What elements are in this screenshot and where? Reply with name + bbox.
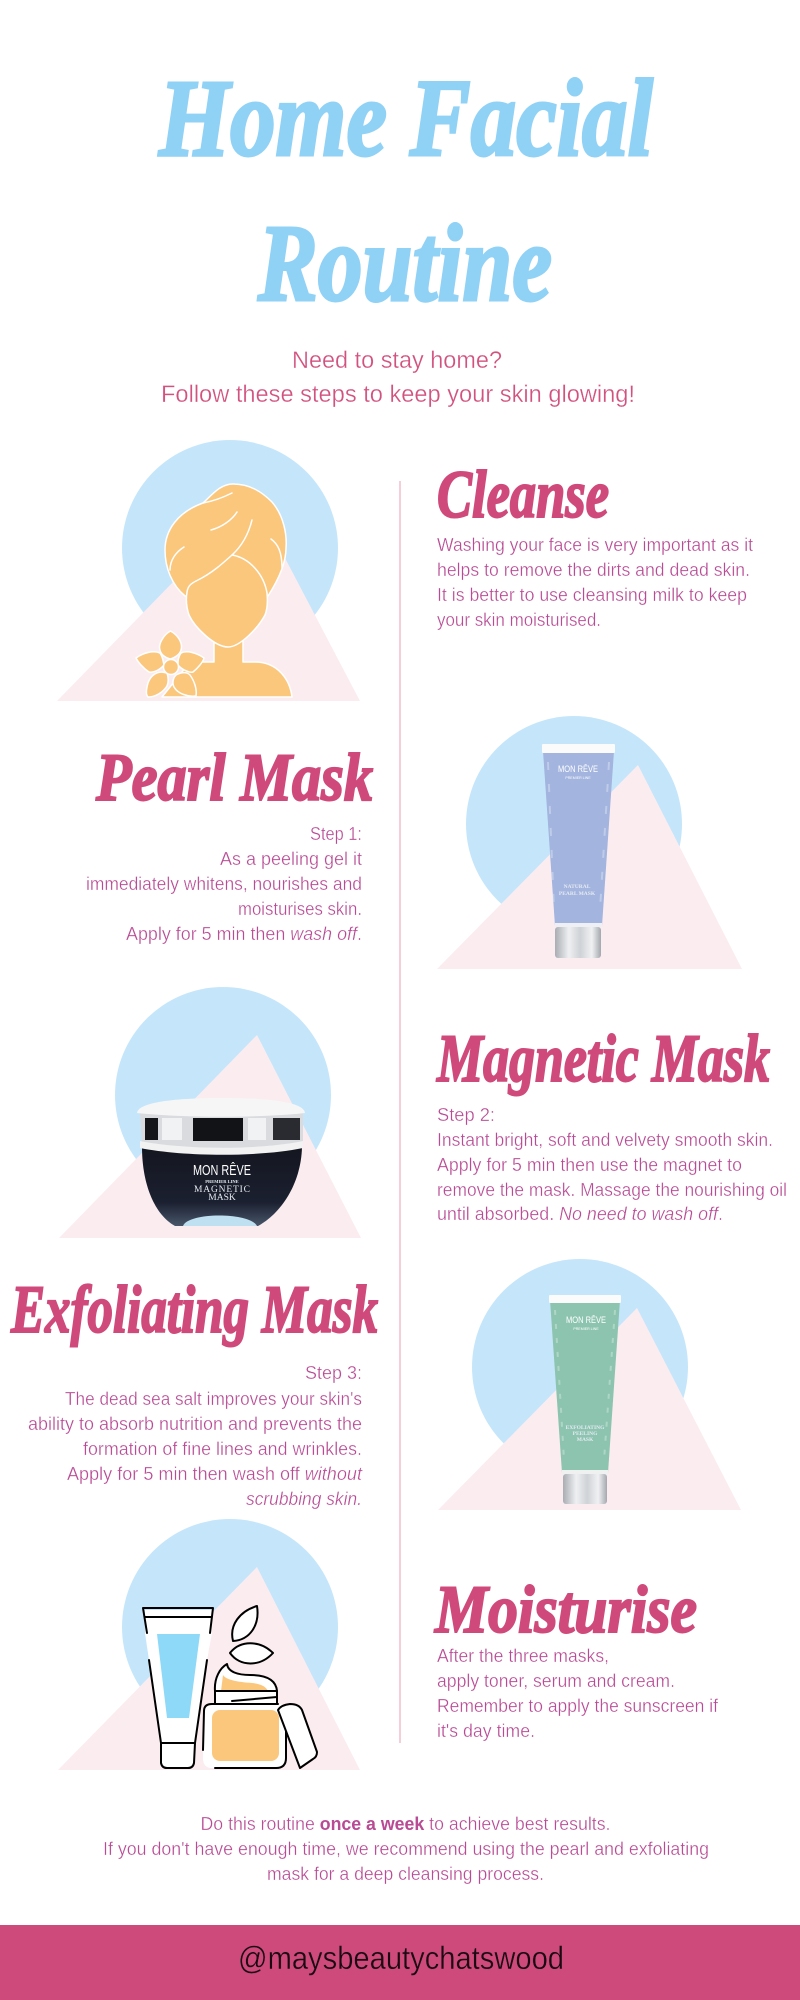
text: cleanse description: [437, 535, 753, 630]
icon: pearl mask tube: [542, 744, 615, 958]
icon: exfoliating mask tube: MON RÊVE: [566, 1315, 606, 1325]
icon: magnetic mask jar: MASK: [208, 1193, 236, 1203]
icon: magnetic mask jar: PREMIER LINE: [205, 1179, 239, 1184]
footer bar: [0, 1925, 800, 2000]
text: exfoliating mask description: Step 3:: [305, 1363, 362, 1383]
icon: magnetic mask jar: MON RÊVE: [193, 1162, 251, 1179]
text: closing advice: [103, 1814, 709, 1884]
panel: magnetic mask: [436, 1020, 787, 1224]
text: magnetic mask description: Step 2:: [437, 1105, 495, 1125]
title: [158, 57, 653, 324]
text: cleanse description: It is better to use cleansing milk to keep: [437, 585, 747, 605]
text: cleanse description: Washing your face is very important as it: [437, 535, 753, 555]
text: cleanse description: helps to remove the dirts and dead skin.: [437, 560, 750, 580]
text: cleanse description: your skin moisturised.: [437, 610, 601, 630]
icon: skincare products: [143, 1606, 317, 1768]
text: exfoliating mask description: formation of fine lines and wrinkles.: [83, 1439, 362, 1459]
heading: Exfoliating Mask: Exfoliating Mask: [10, 1271, 378, 1347]
title: Routine: [257, 202, 552, 324]
text: moisturise description: After the three masks,: [437, 1646, 609, 1666]
panel: pearl mask: [86, 739, 373, 944]
heading: Moisturise: Moisturise: [434, 1571, 697, 1647]
panel: moisturise: [434, 1571, 719, 1741]
panel: exfoliating mask: [10, 1271, 378, 1509]
text: pearl mask description: immediately whitens, nourishes and: [86, 874, 362, 894]
panel: magnetic mask product: [59, 987, 361, 1238]
icon: woman with towel: [136, 484, 292, 697]
panel: moisturiser illustration: [58, 1519, 360, 1770]
text: exfoliating mask description: [28, 1363, 363, 1509]
vertical divider: [399, 481, 401, 1743]
text: pearl mask description: moisturises skin.: [238, 899, 362, 919]
icon: exfoliating mask tube: MASK: [577, 1437, 594, 1443]
icon: exfoliating mask tube: [549, 1295, 621, 1504]
icon: magnetic mask jar: MAGNETIC: [194, 1185, 250, 1195]
text: magnetic mask description: remove the mask. Massage the nourishing oil: [437, 1180, 787, 1200]
text: moisturise description: Remember to apply the sunscreen if: [437, 1696, 719, 1716]
heading: Pearl Mask: Pearl Mask: [95, 739, 373, 815]
title: Home Facial: [158, 57, 653, 179]
icon: exfoliating mask tube: PEELING: [573, 1431, 598, 1437]
footer handle: @maysbeautychatswood: [238, 1940, 564, 1976]
text: moisturise description: it's day time.: [437, 1721, 535, 1741]
subtitle: Need to stay home?: [292, 347, 502, 374]
icon: exfoliating mask tube: PREMIER LINE: [573, 1327, 599, 1331]
text: exfoliating mask description: ability to absorb nutrition and prevents the: [28, 1414, 362, 1434]
icon: magnetic mask jar: [137, 1098, 305, 1226]
text: closing advice: Do this routine once a week to achieve best results.: [200, 1814, 610, 1834]
text: magnetic mask description: until absorbed. No need to wash off.: [437, 1204, 723, 1224]
text: exfoliating mask description: Apply for 5 min then wash off without: [67, 1464, 363, 1484]
icon: pearl mask tube: PEARL MASK: [559, 891, 596, 897]
text: magnetic mask description: Instant bright, soft and velvety smooth skin.: [437, 1130, 773, 1150]
icon: exfoliating mask tube: EXFOLIATING: [566, 1425, 605, 1431]
text: closing advice: mask for a deep cleansing process.: [267, 1864, 544, 1884]
icon: pearl mask tube: MON RÊVE: [558, 764, 598, 774]
text: exfoliating mask description: scrubbing skin.: [246, 1489, 362, 1509]
text: exfoliating mask description: The dead sea salt improves your skin's: [65, 1389, 362, 1409]
icon: pearl mask tube: PREMIER LINE: [565, 776, 591, 780]
panel: cleanse: [437, 456, 753, 630]
icon: pearl mask tube: NATURAL: [564, 884, 591, 890]
text: pearl mask description: Apply for 5 min then wash off.: [126, 924, 362, 944]
text: pearl mask description: [86, 824, 362, 944]
panel: pearl mask product: [437, 716, 742, 969]
subtitle: Follow these steps to keep your skin glowing!: [161, 381, 635, 408]
heading: Cleanse: Cleanse: [437, 456, 609, 532]
subtitle: [161, 347, 635, 408]
text: magnetic mask description: Apply for 5 min then use the magnet to: [437, 1155, 742, 1175]
text: pearl mask description: Step 1:: [310, 824, 362, 844]
panel: exfoliating mask product: [438, 1259, 741, 1510]
text: closing advice: If you don't have enough time, we recommend using the pearl and exfoliating: [103, 1839, 709, 1859]
text: pearl mask description: As a peeling gel it: [220, 849, 362, 869]
text: moisturise description: [437, 1646, 719, 1741]
text: magnetic mask description: [437, 1105, 787, 1224]
text: moisturise description: apply toner, serum and cream.: [437, 1671, 675, 1691]
panel: towel illustration: [57, 440, 360, 701]
